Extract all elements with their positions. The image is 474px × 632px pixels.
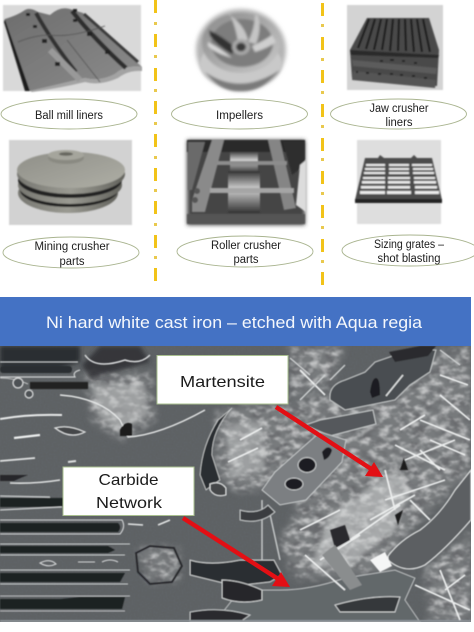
callout: martensite: Martensite xyxy=(180,374,265,391)
divider: left dashed line xyxy=(154,0,157,281)
label: ball mill liners xyxy=(1,99,137,129)
central crystal xyxy=(136,546,182,584)
micrograph xyxy=(0,346,471,622)
left lamellae xyxy=(0,366,72,373)
dark cells centre bottom xyxy=(190,560,282,586)
gray lobe lower right xyxy=(388,470,471,569)
label: impellers: Impellers xyxy=(216,110,263,122)
callout: carbide network: Carbide xyxy=(98,472,159,489)
callout: carbide network: Network xyxy=(96,495,163,512)
image: sizing grate xyxy=(355,140,442,224)
callout: martensite xyxy=(157,356,288,404)
callout: carbide network xyxy=(63,467,194,516)
title banner xyxy=(0,297,471,346)
label: impellers xyxy=(172,99,308,129)
label: ball mill liners: Ball mill liners xyxy=(35,110,103,122)
label: jaw crusher liners xyxy=(330,99,466,129)
image: jaw crusher liners xyxy=(347,5,443,90)
gray carbide lobes, top right xyxy=(330,350,436,410)
label: mining crusher parts xyxy=(3,237,139,268)
arrow: carbide network xyxy=(183,518,290,587)
label: roller crusher parts: parts xyxy=(234,254,259,266)
label: sizing grates xyxy=(342,235,474,266)
label: roller crusher parts: Roller crusher xyxy=(211,240,281,252)
divider: right dashed line xyxy=(321,3,324,285)
image: ball mill liners xyxy=(3,5,142,92)
bottom gray field xyxy=(215,570,420,622)
network cells xyxy=(262,432,346,505)
label: jaw crusher liners: Jaw crusher xyxy=(370,103,429,115)
title banner: Ni hard white cast iron – etched with Aqua regia xyxy=(46,313,423,332)
image: impeller xyxy=(196,9,286,91)
label: mining crusher parts: parts xyxy=(60,256,85,268)
label: sizing grates: Sizing grates – xyxy=(374,239,445,251)
label: sizing grates: shot blasting xyxy=(378,253,440,265)
image: roller crusher parts xyxy=(187,140,306,225)
outline above blob centre xyxy=(60,395,205,437)
label: jaw crusher liners: liners xyxy=(386,117,413,129)
label: mining crusher parts: Mining crusher xyxy=(34,241,110,253)
image: mining crusher parts xyxy=(9,140,132,225)
label: roller crusher parts xyxy=(177,236,313,267)
arrow: martensite xyxy=(276,407,383,477)
bright fibres right xyxy=(228,370,470,620)
